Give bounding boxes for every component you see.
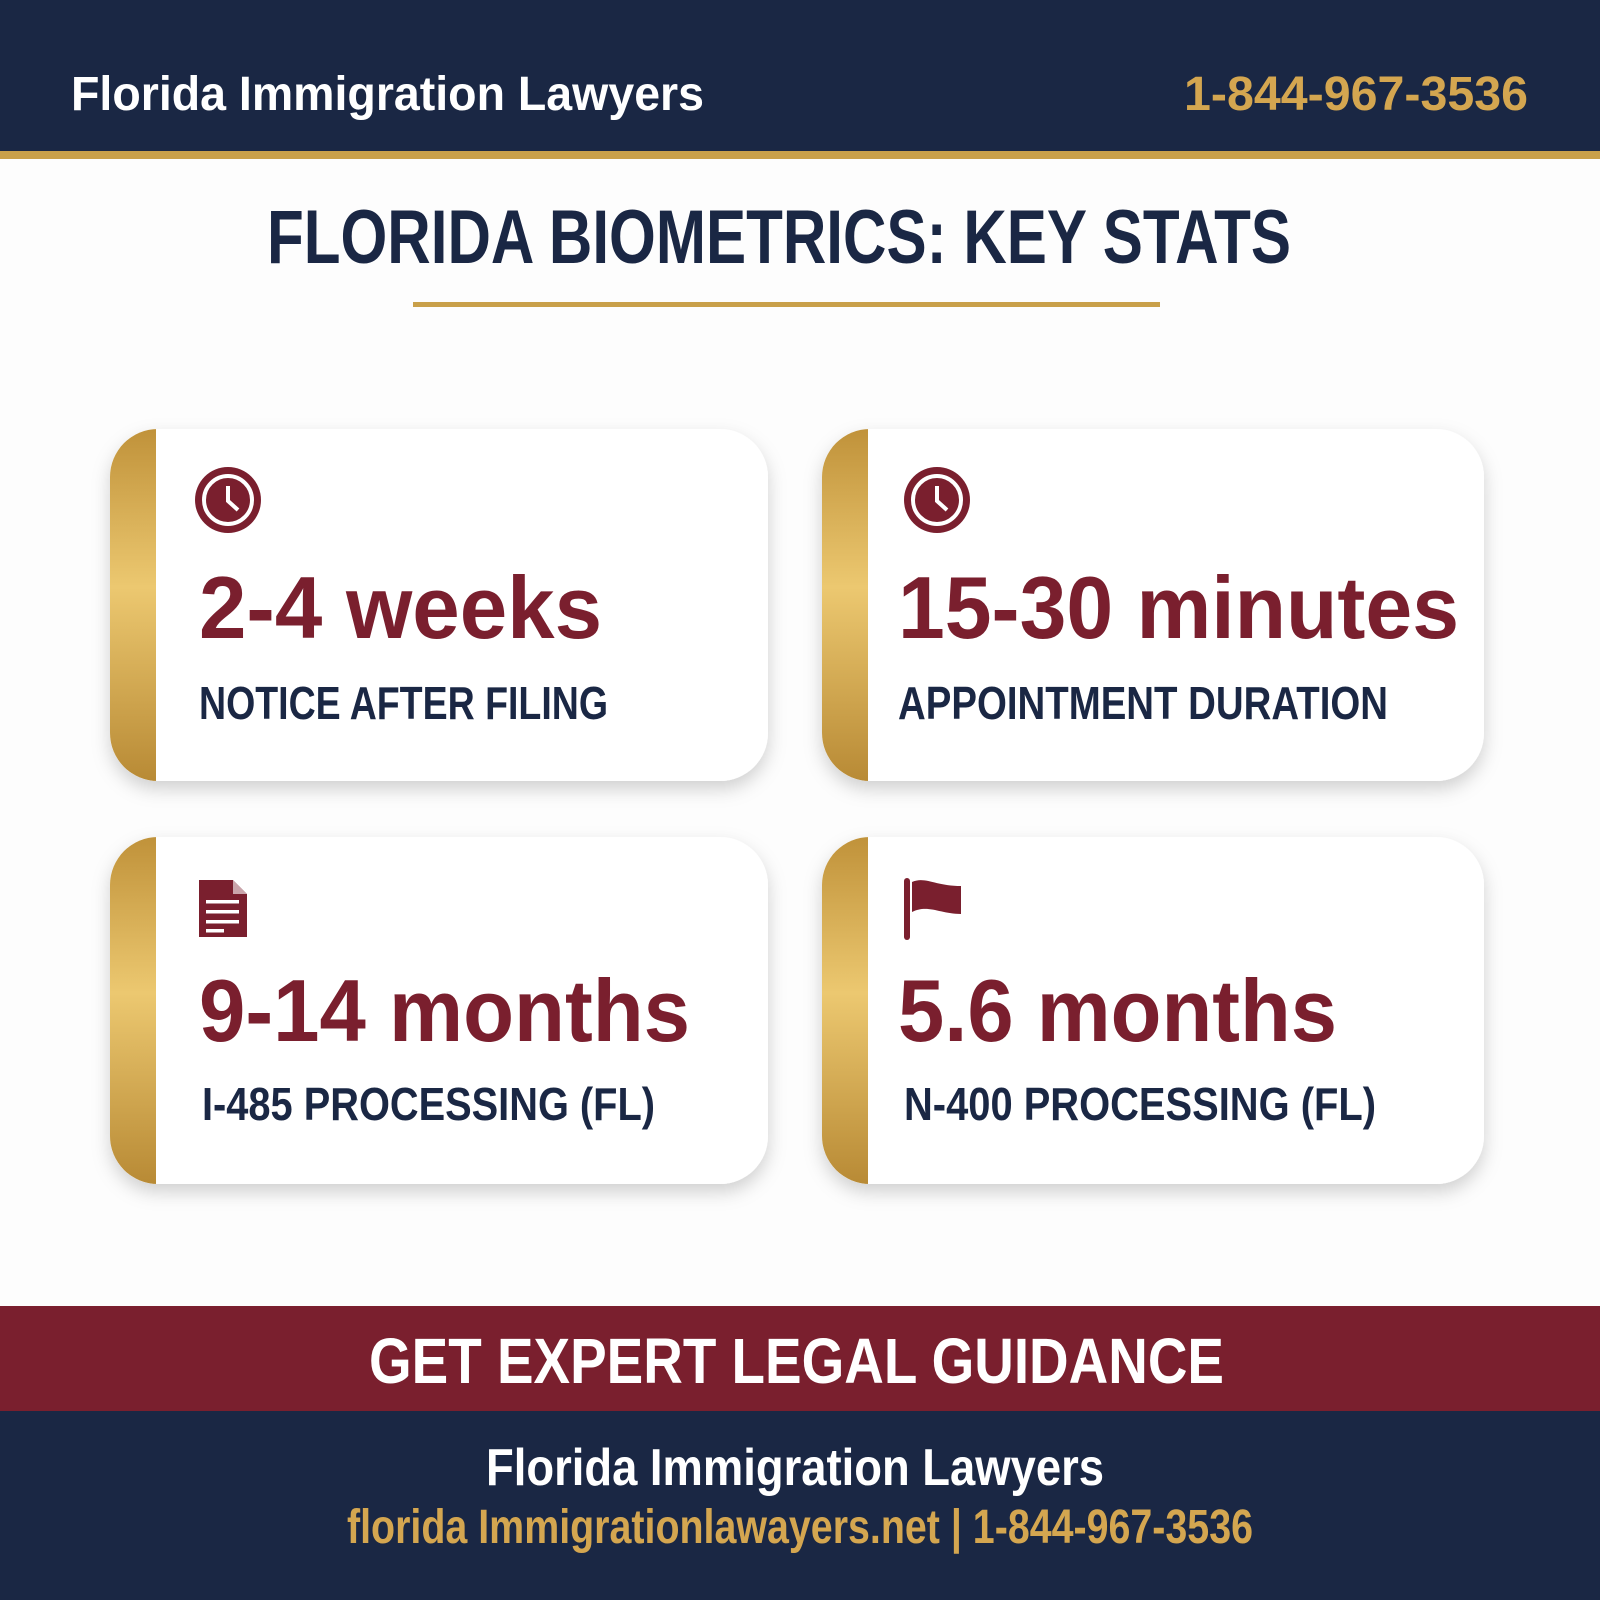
card: I-485 processing bbox=[110, 837, 768, 1184]
footer bbox=[0, 1411, 1600, 1600]
icon: clock bbox=[195, 467, 261, 533]
stat value: 2-4 weeks bbox=[199, 558, 602, 657]
stat value: 9-14 months bbox=[199, 961, 690, 1060]
stat value: 15-30 minutes bbox=[898, 558, 1459, 657]
header phone: 1-844-967-3536 bbox=[1184, 68, 1528, 121]
stat label: N-400 PROCESSING (FL) bbox=[904, 1078, 1376, 1130]
title: FLORIDA BIOMETRICS: KEY STATS bbox=[267, 195, 1291, 280]
title bbox=[267, 195, 1291, 307]
card: notice after filing bbox=[110, 429, 768, 781]
header firm name: Florida Immigration Lawyers bbox=[71, 68, 704, 121]
footer contact: florida Immigrationlawayers.net | 1-844-967-3536 bbox=[347, 1501, 1253, 1554]
card: N-400 processing bbox=[822, 837, 1484, 1184]
call to action band bbox=[0, 1306, 1600, 1411]
stat label: I-485 PROCESSING (FL) bbox=[202, 1078, 655, 1130]
icon: flag bbox=[904, 878, 961, 940]
stat label: NOTICE AFTER FILING bbox=[199, 677, 608, 729]
card: appointment duration bbox=[822, 429, 1484, 781]
icon: clock bbox=[904, 467, 970, 533]
stat value: 5.6 months bbox=[898, 961, 1337, 1060]
stat label: APPOINTMENT DURATION bbox=[898, 677, 1388, 729]
footer firm name: Florida Immigration Lawyers bbox=[486, 1439, 1104, 1497]
header bar bbox=[0, 0, 1600, 159]
icon: document bbox=[199, 880, 247, 937]
call to action band: GET EXPERT LEGAL GUIDANCE bbox=[369, 1325, 1224, 1397]
